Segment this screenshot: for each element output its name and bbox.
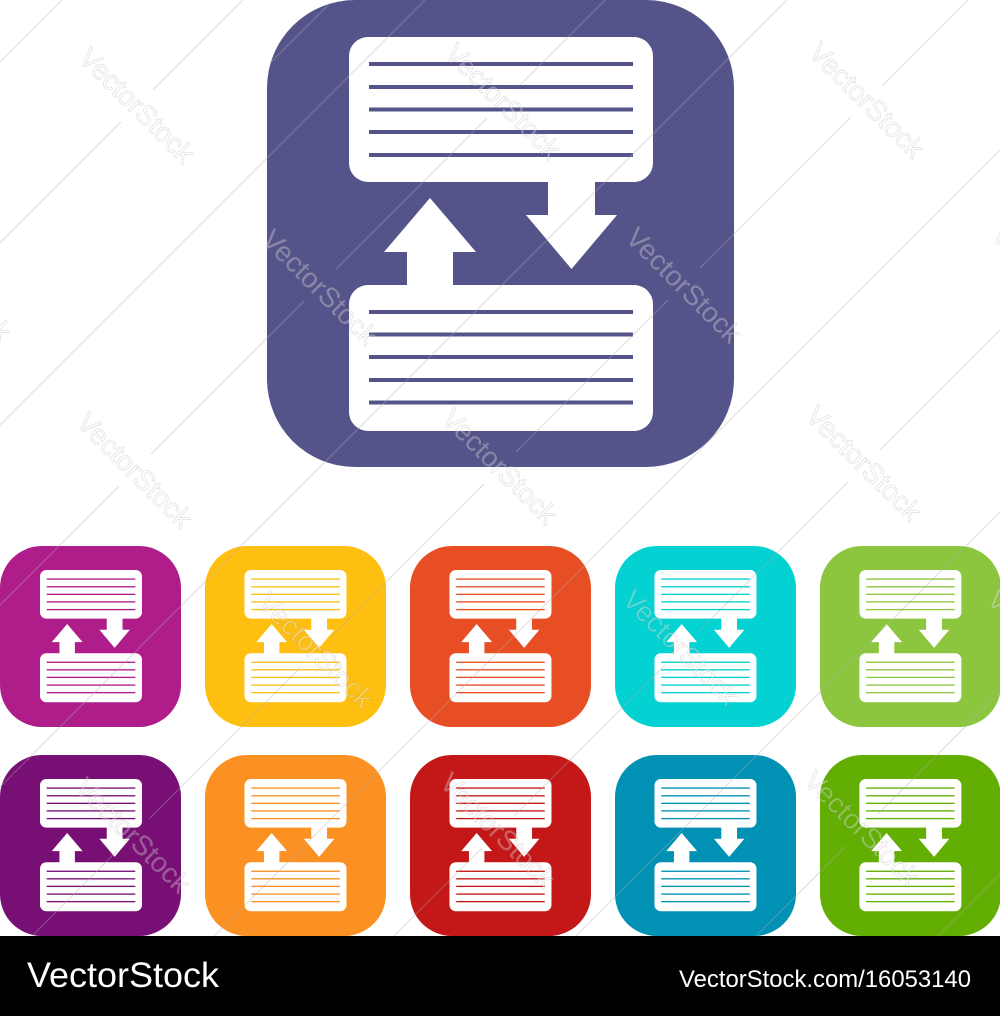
watermark text: VectorStock xyxy=(620,222,748,350)
small icon: light green xyxy=(820,546,1000,727)
small icon: teal blue xyxy=(615,755,796,936)
watermark text: VectorStock xyxy=(73,42,201,170)
small icon: orange xyxy=(205,755,386,936)
watermark text: VectorStock xyxy=(434,767,562,895)
small icon: magenta xyxy=(0,546,181,727)
small icon: dark purple xyxy=(0,755,181,936)
watermark text: VectorStock xyxy=(798,765,926,893)
watermark text: VectorStock xyxy=(436,403,564,531)
small icon: green xyxy=(820,755,1000,936)
small icon: yellow xyxy=(205,546,386,727)
watermark text: VectorStock xyxy=(439,38,567,166)
footer image id: VectorStock.com/16053140 xyxy=(679,966,971,993)
watermark text: VectorStock xyxy=(803,37,931,165)
watermark text: VectorStock xyxy=(71,407,199,535)
footer band xyxy=(0,936,1000,1016)
small icon: orange red xyxy=(410,546,591,727)
watermark text: VectorStock xyxy=(69,772,197,900)
small icon: red xyxy=(410,755,591,936)
watermark text: VectorStock xyxy=(256,224,384,352)
small icon: cyan xyxy=(615,546,796,727)
watermark text: VectorStock xyxy=(252,587,380,715)
watermark text: VectorStock xyxy=(800,400,928,528)
large icon: two text boxes exchanging arrows xyxy=(267,0,734,467)
footer logo text: VectorStock xyxy=(27,956,220,995)
watermark text: VectorStock xyxy=(617,584,745,712)
